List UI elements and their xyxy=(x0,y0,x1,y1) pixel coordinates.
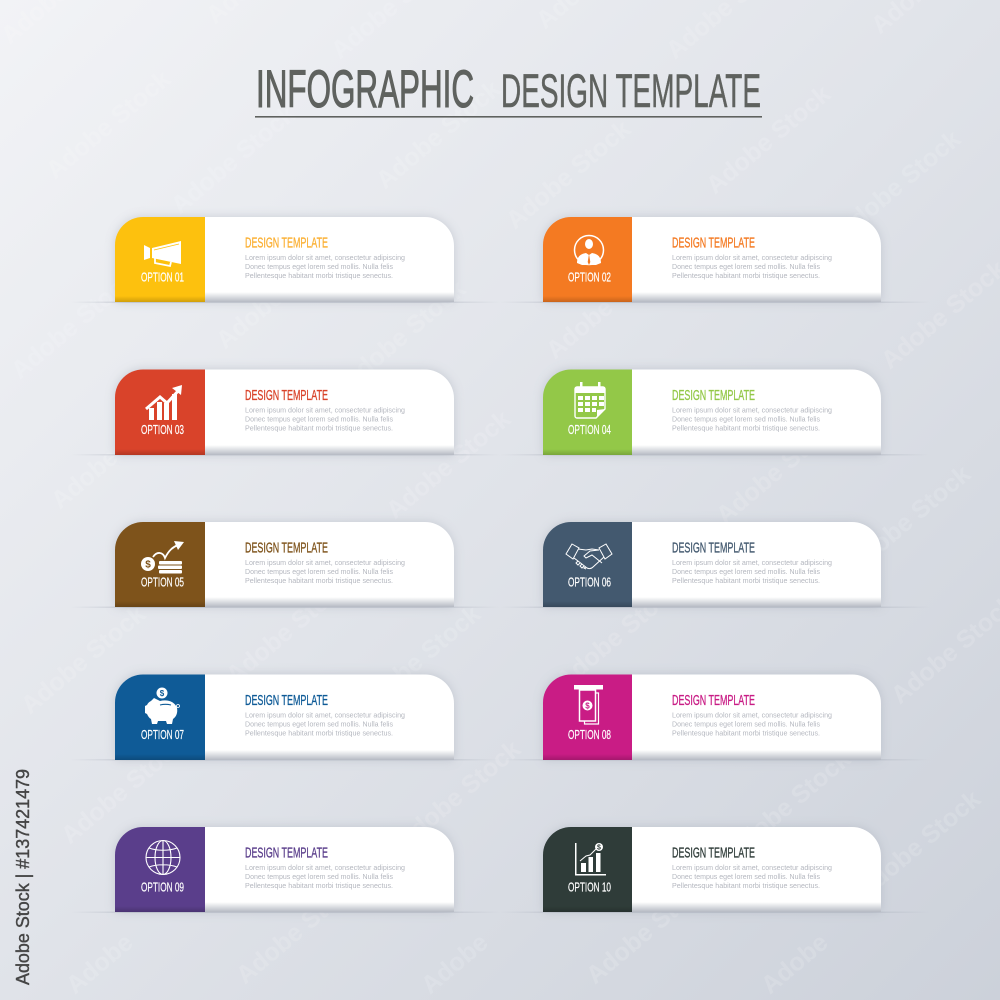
watermark pattern: Adobe Stock xyxy=(371,75,506,195)
text block: option 04: Donec tempus eget lorem sed mollis. Nulla felis xyxy=(672,414,820,424)
label: option 09: OPTION 09 xyxy=(141,880,184,895)
text block: option 08: Lorem ipsum dolor sit amet, consectetur adipiscing xyxy=(672,710,832,720)
tab: option 07 xyxy=(115,674,205,760)
heading: option 02: DESIGN TEMPLATE xyxy=(672,236,755,252)
icon: piggy bank xyxy=(145,688,180,724)
text block: option 02: Pellentesque habitant morbi tristique senectus. xyxy=(672,271,820,280)
text block: option 01: Pellentesque habitant morbi tristique senectus. xyxy=(245,271,393,280)
icon: cash dispenser xyxy=(574,685,603,724)
text block: option 08 xyxy=(672,710,832,738)
tab: option 06 xyxy=(543,522,632,607)
icon: chart with coin xyxy=(575,843,606,876)
text block: option 06: Lorem ipsum dolor sit amet, consectetur adipiscing xyxy=(672,558,832,567)
watermark pattern: Adobe Stock xyxy=(551,575,686,695)
text block: option 10 xyxy=(672,863,832,890)
title underline xyxy=(255,116,762,118)
heading: option 04: DESIGN TEMPLATE xyxy=(672,388,755,404)
watermark pattern: Adobe Stock xyxy=(336,275,471,395)
heading: option 09: DESIGN TEMPLATE xyxy=(245,846,328,862)
icon: coins and arrow: $ xyxy=(145,560,151,570)
panel: option 05 xyxy=(70,522,500,608)
watermark pattern: Adobe Stock xyxy=(46,395,181,515)
watermark pattern: Adobe Stock xyxy=(391,735,526,855)
text block: option 03: Pellentesque habitant morbi tristique senectus. xyxy=(245,424,393,432)
text block: option 09 xyxy=(245,863,405,890)
panel: option 03 xyxy=(70,369,500,456)
text block: option 07: Donec tempus eget lorem sed mollis. Nulla felis xyxy=(245,720,393,728)
watermark pattern: Adobe Stock xyxy=(16,600,151,720)
text block: option 06: Donec tempus eget lorem sed mollis. Nulla felis xyxy=(672,567,820,576)
panel: option 08 xyxy=(500,674,930,760)
watermark pattern: Adobe xyxy=(416,928,494,1000)
text block: option 03 xyxy=(245,406,405,432)
text block: option 07 xyxy=(245,710,405,738)
heading: option 06: DESIGN TEMPLATE xyxy=(672,541,755,557)
text block: option 03: Lorem ipsum dolor sit amet, consectetur adipiscing xyxy=(245,406,405,414)
panel: option 06 xyxy=(500,522,930,608)
text block: option 01: Lorem ipsum dolor sit amet, consectetur adipiscing xyxy=(245,253,405,262)
icon: cash dispenser: $ xyxy=(585,702,590,710)
tab: option 04 xyxy=(543,370,632,455)
text block: option 05: Pellentesque habitant morbi tristique senectus. xyxy=(245,576,393,585)
text block: option 03: Donec tempus eget lorem sed mollis. Nulla felis xyxy=(245,414,393,424)
heading: option 01: DESIGN TEMPLATE xyxy=(245,236,328,252)
tab: option 10 xyxy=(543,827,632,912)
text block: option 04 xyxy=(672,406,832,432)
panel: option 01 xyxy=(70,217,500,303)
watermark pattern: Adobe Stock xyxy=(841,460,976,580)
label: option 07: OPTION 07 xyxy=(141,727,184,742)
label: option 04: OPTION 04 xyxy=(568,422,611,437)
text block: option 02 xyxy=(672,253,832,280)
icon: globe xyxy=(146,840,180,874)
title: infographic: INFOGRAPHIC xyxy=(256,60,474,119)
watermark pattern: Adobe Stock xyxy=(581,870,716,990)
text block: option 02: Donec tempus eget lorem sed mollis. Nulla felis xyxy=(672,262,820,271)
text block: option 01: Donec tempus eget lorem sed mollis. Nulla felis xyxy=(245,262,393,271)
icon: coins and arrow xyxy=(141,541,184,574)
text block: option 09: Pellentesque habitant morbi tristique senectus. xyxy=(245,881,393,890)
tab: option 03 xyxy=(115,370,205,455)
text block: option 02: Lorem ipsum dolor sit amet, consectetur adipiscing xyxy=(672,253,832,262)
panel: option 09 xyxy=(70,827,500,913)
label: option 10: OPTION 10 xyxy=(568,880,611,895)
text block: option 07: Pellentesque habitant morbi tristique senectus. xyxy=(245,728,393,738)
heading: option 07: DESIGN TEMPLATE xyxy=(245,693,328,709)
tab: option 05 xyxy=(115,522,205,607)
icon: handshake xyxy=(566,544,612,569)
icon: growth chart xyxy=(146,385,182,420)
watermark pattern: Adobe Stock xyxy=(541,245,676,365)
watermark pattern: Adobe Stock xyxy=(211,235,346,355)
text block: option 06: Pellentesque habitant morbi tristique senectus. xyxy=(672,576,820,585)
tab: option 08 xyxy=(543,674,632,760)
watermark pattern: Adobe Stock xyxy=(381,405,516,525)
text block: option 09: Lorem ipsum dolor sit amet, consectetur adipiscing xyxy=(245,863,405,872)
text block: option 01 xyxy=(245,253,405,280)
label: option 06: OPTION 06 xyxy=(568,575,611,590)
icon: calendar xyxy=(575,382,605,418)
panel: option 04 xyxy=(500,369,930,456)
text block: option 04: Lorem ipsum dolor sit amet, consectetur adipiscing xyxy=(672,406,832,414)
label: option 03: OPTION 03 xyxy=(141,422,184,437)
panel: option 07 xyxy=(70,674,500,760)
icon: chart with coin: $ xyxy=(597,844,601,852)
label: option 01: OPTION 01 xyxy=(141,270,184,285)
watermark pattern: Adobe Stock xyxy=(231,870,366,990)
text block: option 08: Pellentesque habitant morbi tristique senectus. xyxy=(672,728,820,738)
label: option 02: OPTION 02 xyxy=(568,270,611,285)
watermark pattern: Adobe Stock xyxy=(831,125,966,245)
heading: option 03: DESIGN TEMPLATE xyxy=(245,388,328,404)
watermark pattern: Adobe Stock xyxy=(41,65,176,185)
watermark pattern: Adobe Stock xyxy=(221,570,356,690)
stock credit: Adobe Stock | #137421479 xyxy=(13,769,33,985)
text block: option 09: Donec tempus eget lorem sed mollis. Nulla felis xyxy=(245,872,393,881)
text block: option 10: Donec tempus eget lorem sed mollis. Nulla felis xyxy=(672,872,820,881)
text block: option 06 xyxy=(672,558,832,585)
text block: option 04: Pellentesque habitant morbi tristique senectus. xyxy=(672,424,820,432)
title xyxy=(255,60,762,119)
watermark pattern: Adobe Stock xyxy=(166,100,301,220)
watermark pattern: Adobe Stock xyxy=(351,600,486,720)
title: design template: DESIGN TEMPLATE xyxy=(501,64,761,117)
text block: option 05: Donec tempus eget lorem sed mollis. Nulla felis xyxy=(245,567,393,576)
watermark pattern: Adobe xyxy=(61,928,139,1000)
text block: option 05 xyxy=(245,558,405,585)
watermark pattern: Adobe Stock xyxy=(56,730,191,850)
watermark pattern: Adobe Stock xyxy=(851,785,986,905)
text block: option 08: Donec tempus eget lorem sed mollis. Nulla felis xyxy=(672,720,820,728)
icon: megaphone xyxy=(144,241,181,266)
tab: option 02 xyxy=(543,217,632,302)
label: option 05: OPTION 05 xyxy=(141,575,184,590)
text block: option 10: Pellentesque habitant morbi tristique senectus. xyxy=(672,881,820,890)
text block: option 07: Lorem ipsum dolor sit amet, consectetur adipiscing xyxy=(245,710,405,720)
watermark pattern: Adobe Stock xyxy=(721,745,856,865)
watermark pattern: Adobe xyxy=(756,928,834,1000)
watermark pattern: Adobe Stock xyxy=(501,115,636,235)
watermark pattern: Adobe Stock xyxy=(711,410,846,530)
text block: option 05: Lorem ipsum dolor sit amet, consectetur adipiscing xyxy=(245,558,405,567)
watermark pattern: Adobe Stock xyxy=(6,265,141,385)
tab: option 09 xyxy=(115,827,205,912)
watermark pattern: Adobe Stock xyxy=(701,80,836,200)
heading: option 08: DESIGN TEMPLATE xyxy=(672,693,755,709)
icon: piggy bank: $ xyxy=(160,689,165,698)
panel: option 02 xyxy=(500,217,930,303)
text block: option 10: Lorem ipsum dolor sit amet, consectetur adipiscing xyxy=(672,863,832,872)
label: option 08: OPTION 08 xyxy=(568,727,611,742)
heading: option 10: DESIGN TEMPLATE xyxy=(672,846,755,862)
icon: businessman xyxy=(574,236,604,265)
heading: option 05: DESIGN TEMPLATE xyxy=(245,541,328,557)
tab: option 01 xyxy=(115,217,205,302)
panel: option 10 xyxy=(500,827,930,913)
